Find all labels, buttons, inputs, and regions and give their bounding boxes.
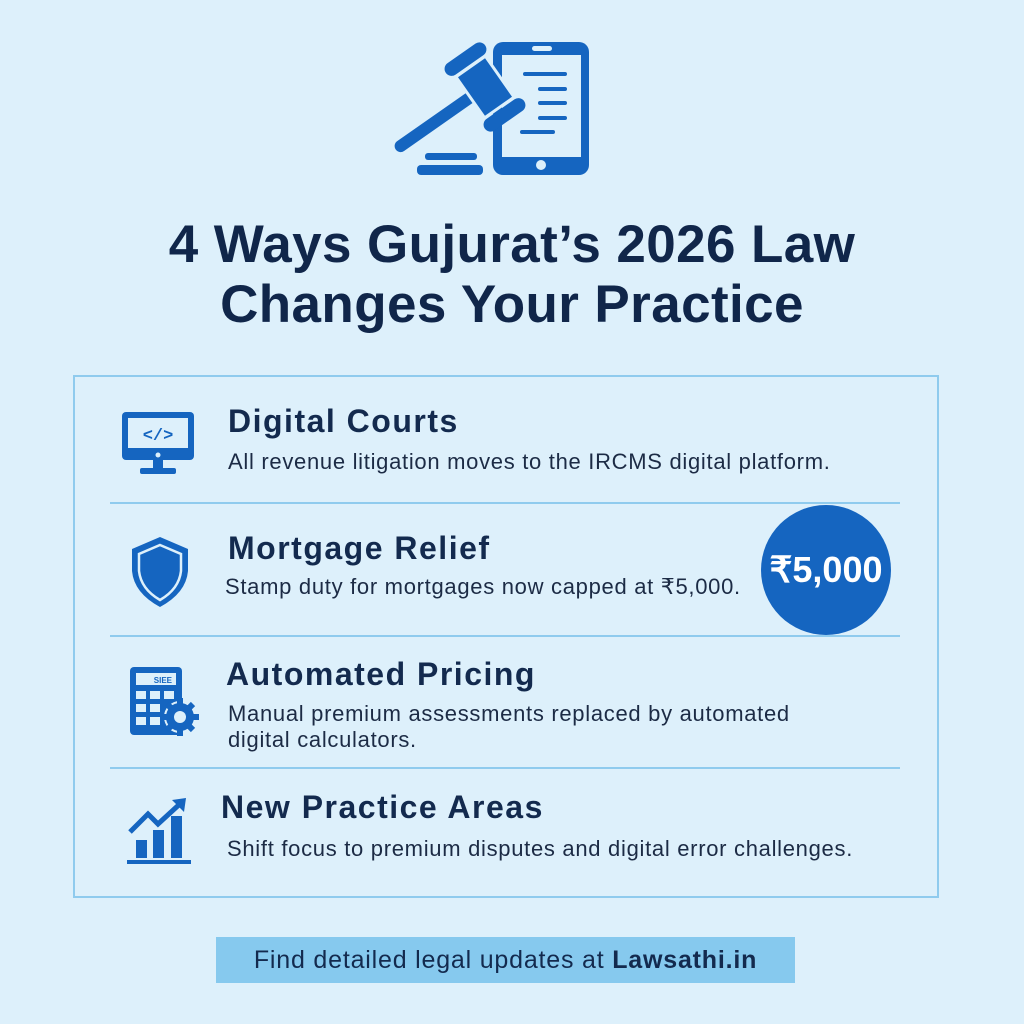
icon: growth chart [127,798,191,864]
text: new practice areas: Shift focus to premium disputes and digital error challenges. [227,836,853,861]
footer banner [216,937,795,983]
text: mortgage relief: Stamp duty for mortgages now capped at ₹5,000. [225,574,741,599]
callout: ₹5,000 badge [761,505,891,635]
callout: ₹5,000 badge: ₹5,000 [770,549,882,590]
footer banner: Find detailed legal updates at Lawsathi.in [254,946,757,974]
text: automated pricing [228,701,790,752]
title: 4 Ways Gujurat’s 2026 Law [169,215,855,274]
icon: calculator with gear [130,667,199,736]
icon: gavel and tablet [394,42,589,175]
panel: four changes [73,375,939,898]
title [169,215,855,334]
icon: monitor: </> [143,427,173,446]
text: digital courts: All revenue litigation moves to the IRCMS digital platform. [228,449,831,474]
heading: Mortgage Relief: Mortgage Relief [228,530,491,566]
icon: calculator with gear: SIEE [154,676,173,685]
icon: monitor [122,412,194,474]
text: automated pricing: Manual premium assessments replaced by automated [228,701,790,726]
icon: shield [132,537,188,607]
heading: New Practice Areas: New Practice Areas [221,789,544,825]
title: Changes Your Practice [220,275,804,334]
heading: Automated Pricing: Automated Pricing [226,656,536,692]
heading: Digital Courts: Digital Courts [228,403,459,439]
text: automated pricing: digital calculators. [228,727,417,752]
